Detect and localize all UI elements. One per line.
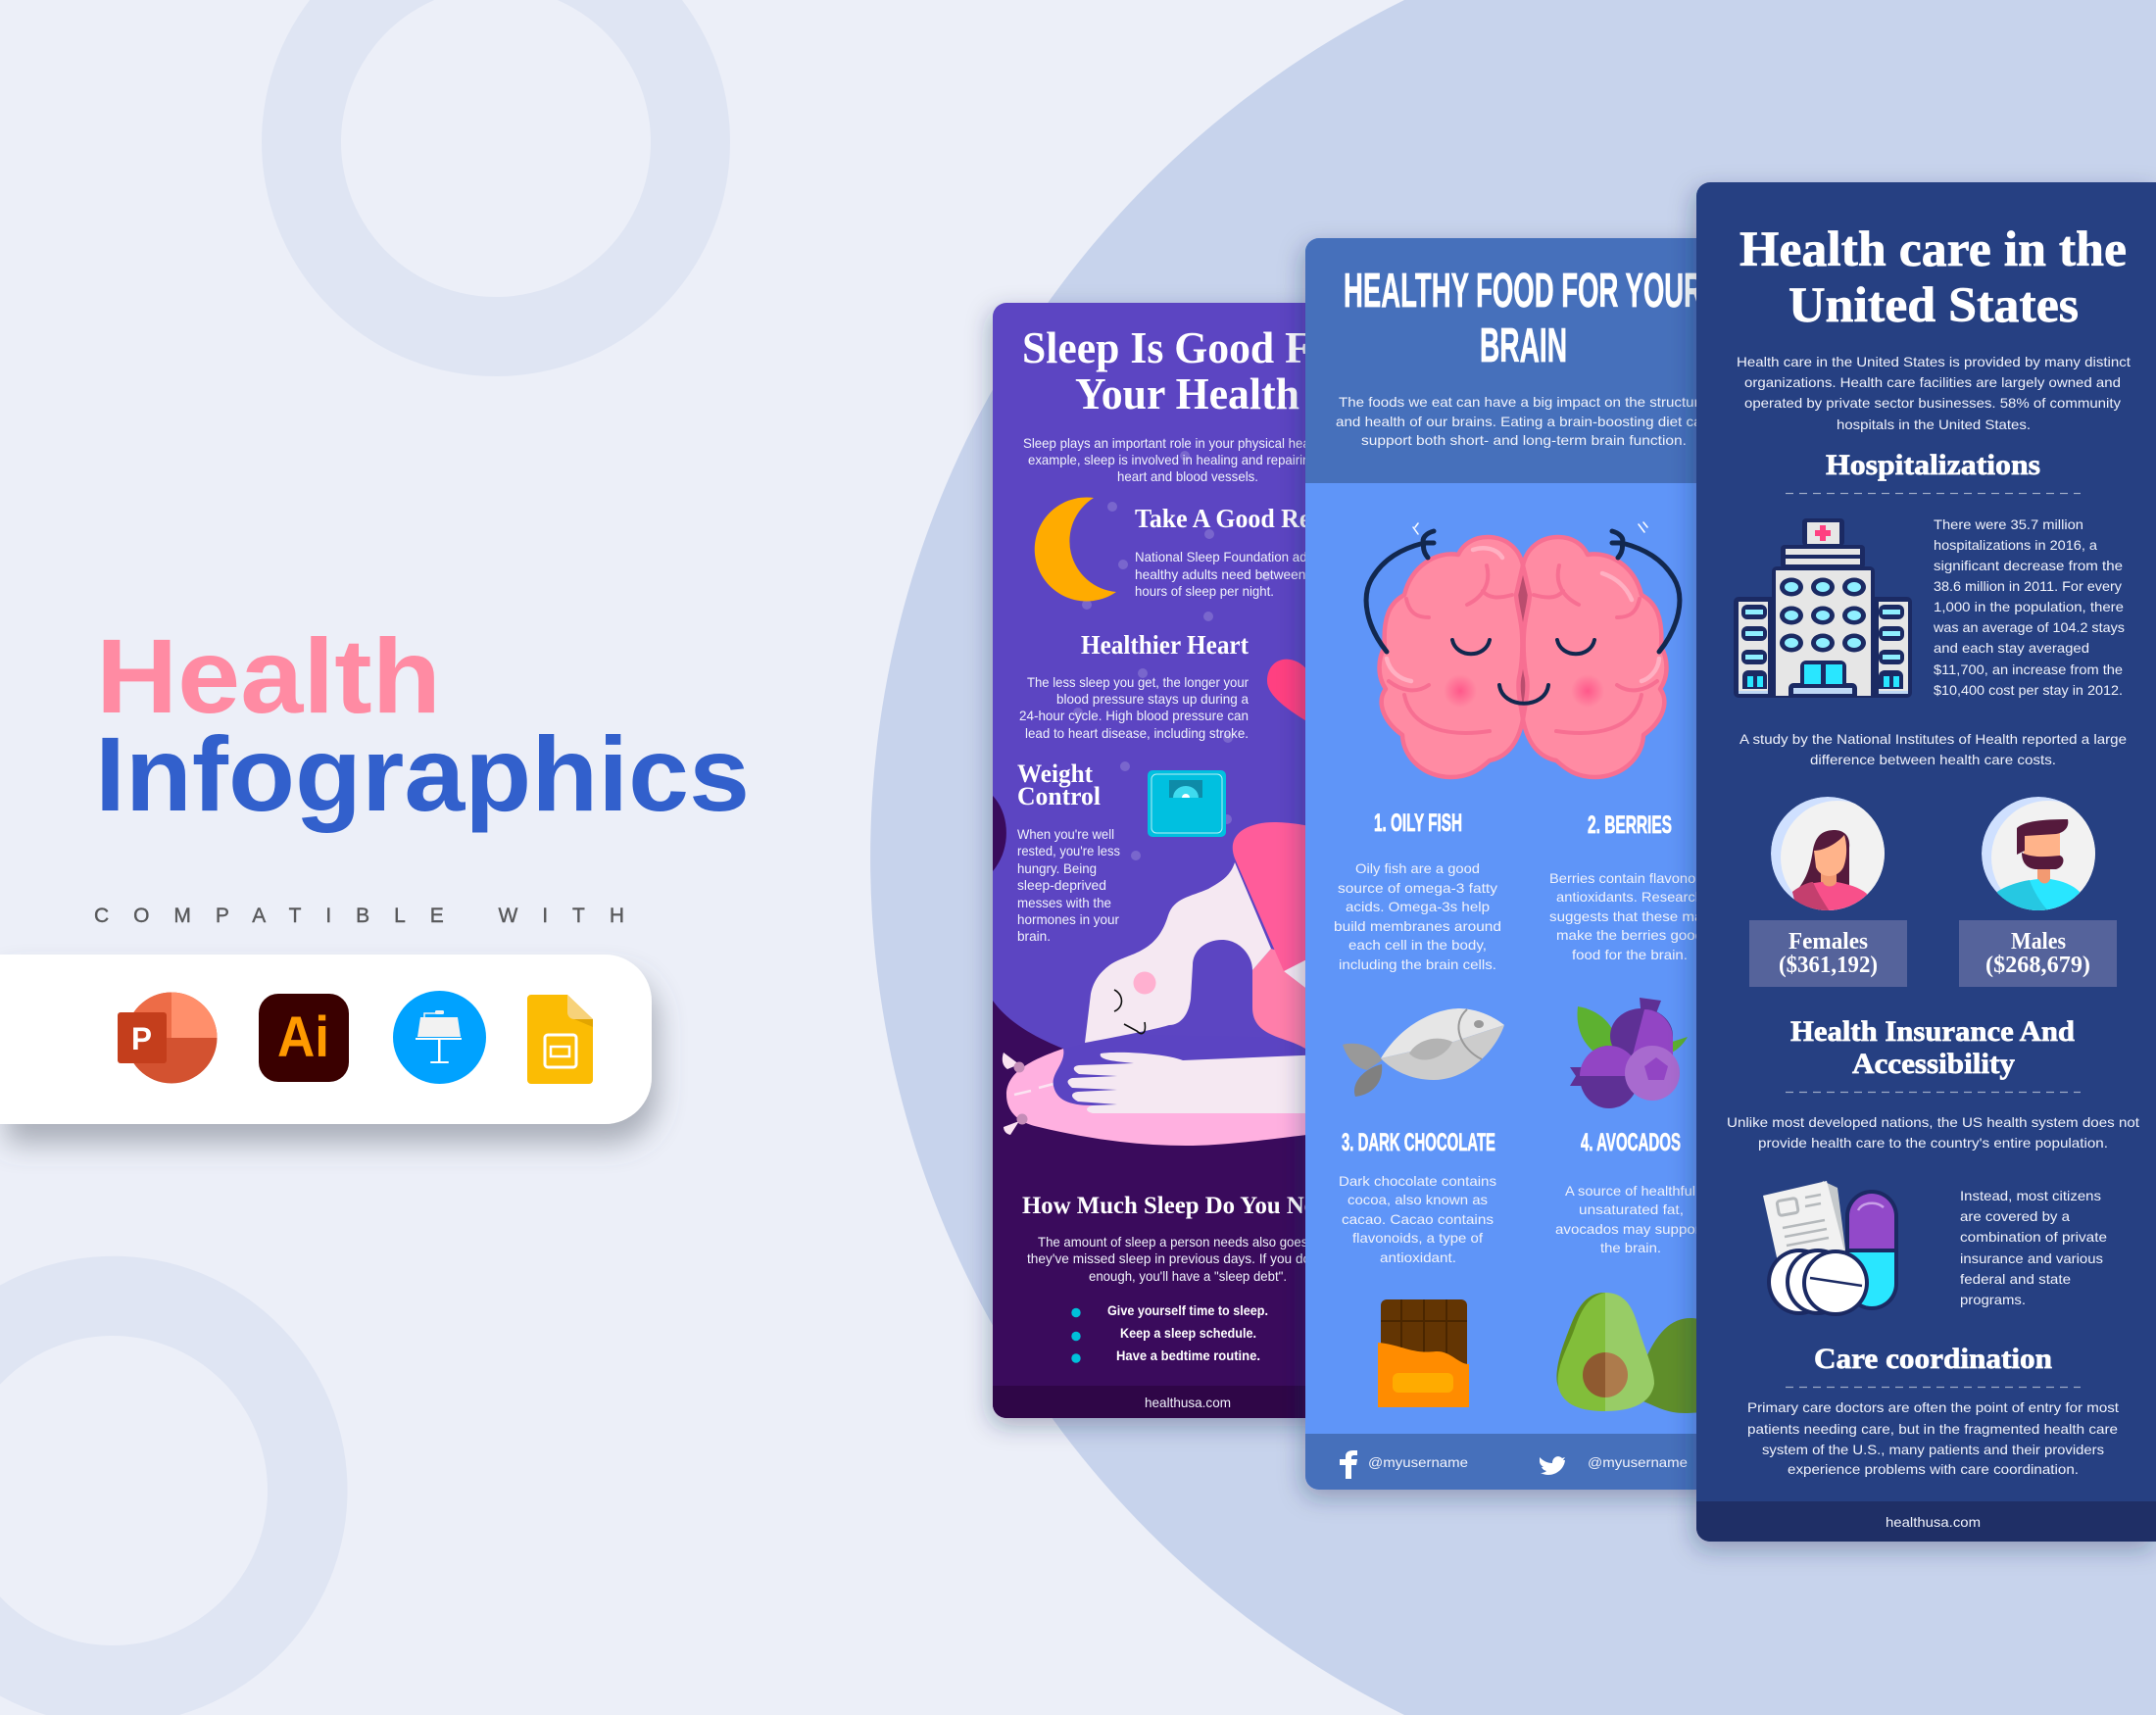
text: weight: [1017, 826, 1120, 944]
title: [95, 616, 750, 833]
item 4: avocados: the brain.: [1600, 1240, 1661, 1255]
text: weight: hormones in your: [1017, 911, 1119, 927]
text: NIH study: [1740, 731, 2127, 767]
text: sleep debt: [1027, 1234, 1347, 1284]
icon: Keynote: [393, 991, 486, 1084]
text: health intro: organizations. Health care facilities are largely owned and: [1744, 374, 2121, 390]
icon: Google Slides: [527, 995, 593, 1084]
item 3: dark chocolate: 3. DARK CHOCOLATE: [1342, 1129, 1495, 1156]
text: brain intro: The foods we eat can have a big impact on the structure: [1339, 394, 1707, 410]
item 2: berries: food for the brain.: [1572, 947, 1688, 962]
illustration: smiling brain: [1366, 522, 1680, 777]
heading: insurance: Health Insurance And: [1790, 1015, 2075, 1048]
sleeping figure illustration: [993, 796, 1372, 1418]
text: hospitalization stats: There were 35.7 million: [1934, 516, 2083, 532]
social handle: twitter: @myusername: [1588, 1454, 1688, 1470]
text: insurance detail: programs.: [1960, 1292, 2026, 1307]
icon: pills and report: [1763, 1181, 1898, 1316]
text: care coordination: experience problems with care coordination.: [1788, 1461, 2079, 1477]
text: brain intro: [1336, 394, 1710, 448]
heading: weight control: [1017, 760, 1101, 810]
icon: blueberries: [1570, 998, 1688, 1108]
item 2: berries: 2. BERRIES: [1588, 811, 1672, 839]
panel: sleep infographic: [993, 303, 1385, 1418]
heading: hospitalizations: Hospitalizations: [1826, 449, 2040, 481]
heading: sleep title: [1022, 322, 1351, 418]
text: weight: messes with the: [1017, 895, 1111, 910]
icon: heart: [1267, 660, 1372, 725]
icon: avocado: [1556, 1293, 1744, 1413]
label: females: [1749, 920, 1907, 987]
text: hospitalization stats: hospitalizations in 2016, a: [1934, 537, 2097, 553]
text: NIH study: A study by the National Institutes of Health reported a large: [1740, 731, 2127, 747]
text: hospitalization stats: and each stay averaged: [1934, 640, 2089, 656]
label: males: [1959, 920, 2117, 987]
text: weight: hungry. Being: [1017, 860, 1097, 876]
item 1: oily fish: acids. Omega-3s help: [1346, 899, 1490, 914]
text: heart: [1019, 674, 1249, 741]
text: insurance detail: combination of private: [1960, 1229, 2107, 1245]
item 1: oily fish: [1334, 809, 1501, 972]
subtitle: compatible with: COMPATIBLE WITH: [94, 905, 624, 927]
heading: sleep title: Sleep Is Good For: [1022, 322, 1351, 372]
icon: chocolate bar: [1378, 1299, 1469, 1407]
text: care coordination: patients needing care, but in the fragmented health care: [1747, 1421, 2118, 1437]
text: weight: sleep-deprived: [1017, 877, 1106, 893]
text: hospitalization stats: significant decrease from the: [1934, 558, 2123, 573]
item 2: berries: [1549, 811, 1714, 962]
text: insurance intro: Unlike most developed nations, the US health system does not: [1727, 1114, 2139, 1130]
item 3: dark chocolate: cocoa, also known as: [1348, 1192, 1488, 1207]
text: weight: rested, you're less: [1017, 843, 1120, 858]
icon: hospital: [1734, 518, 1912, 698]
footer url: healthusa.com: [1886, 1514, 1981, 1530]
text: hospitalization stats: 1,000 in the population, there: [1934, 599, 2124, 614]
avatar: male: [1982, 797, 2095, 910]
text: care coordination: system of the U.S., many patients and their providers: [1762, 1442, 2104, 1457]
text: hospitalization stats: 38.6 million in 2011. For every: [1934, 578, 2122, 594]
text: insurance detail: insurance and various: [1960, 1250, 2103, 1266]
item 1: oily fish: including the brain cells.: [1339, 956, 1496, 972]
label: males: Males: [2011, 929, 2066, 955]
item 3: dark chocolate: cacao. Cacao contains: [1342, 1211, 1494, 1227]
heading: brain food title: BRAIN: [1480, 319, 1567, 372]
text: care coordination: [1747, 1399, 2119, 1477]
item 3: dark chocolate: flavonoids, a type of: [1352, 1230, 1483, 1246]
panel: brain food infographic: [1305, 238, 1746, 1490]
text: hospitalization stats: $11,700, an increase from the: [1934, 662, 2123, 677]
heading: brain food title: [1344, 265, 1703, 372]
item 2: berries: suggests that these may: [1549, 908, 1710, 924]
heading: sleep title: Your Health: [1075, 368, 1299, 418]
item 4: avocados: 4. AVOCADOS: [1581, 1129, 1681, 1156]
text: health intro: operated by private sector businesses. 58% of community: [1744, 395, 2121, 411]
item 4: avocados: A source of healthful: [1565, 1183, 1695, 1199]
footer bar: [993, 1386, 1385, 1418]
text: insurance intro: provide health care to the country's entire population.: [1758, 1135, 2108, 1151]
item 3: dark chocolate: antioxidant.: [1380, 1250, 1456, 1265]
background large circle: [870, 0, 2156, 1715]
list: sleep tips: Give yourself time to sleep.: [1107, 1303, 1268, 1318]
heading: health care title: Health care in the: [1740, 222, 2127, 277]
text: rest: [1135, 549, 1337, 599]
icon: fish: [1343, 1008, 1504, 1097]
title: Health: [96, 616, 441, 735]
heading: take a good rest: Take A Good Rest: [1135, 504, 1329, 533]
heading: care coordination: Care coordination: [1814, 1343, 2052, 1375]
item 1: oily fish: Oily fish are a good: [1355, 860, 1480, 876]
item 4: avocados: unsaturated fat,: [1579, 1201, 1684, 1217]
item 2: berries: make the berries good: [1556, 927, 1703, 943]
text: hospitalization stats: $10,400 cost per stay in 2012.: [1934, 682, 2123, 698]
text: hospitalization stats: [1933, 516, 2125, 698]
heading: insurance: [1790, 1015, 2075, 1080]
text: intro: [1023, 435, 1350, 484]
avatar: female: [1771, 797, 1885, 910]
icon: twitter: [1540, 1456, 1565, 1475]
heading: brain food title: HEALTHY FOOD FOR YOUR: [1344, 265, 1703, 318]
heading: healthier heart: Healthier Heart: [1081, 630, 1249, 660]
icon: Illustrator: Ai: [277, 1005, 329, 1069]
text: intro: heart and blood vessels.: [1117, 468, 1258, 484]
icon: facebook: [1340, 1450, 1357, 1479]
text: rest: healthy adults need between 7-9: [1135, 566, 1329, 582]
text: weight: brain.: [1017, 928, 1051, 944]
heading: health care title: [1740, 222, 2127, 333]
text: health intro: Health care in the United States is provided by many distinct: [1737, 354, 2131, 369]
text: brain intro: and health of our brains. Eating a brain-boosting diet can: [1336, 414, 1710, 429]
item 3: dark chocolate: [1339, 1129, 1496, 1265]
heading: weight control: Control: [1017, 782, 1101, 810]
icon: scale: [1148, 770, 1226, 837]
text: heart: The less sleep you get, the longer your: [1027, 674, 1249, 690]
text: sleep debt: The amount of sleep a person needs also goes up if: [1038, 1234, 1336, 1250]
item 1: oily fish: 1. OILY FISH: [1374, 809, 1462, 837]
item 2: berries: Berries contain flavonoids: [1549, 870, 1714, 886]
item 3: dark chocolate: Dark chocolate contains: [1339, 1173, 1496, 1189]
text: insurance detail: are covered by a: [1960, 1208, 2070, 1224]
social handle: facebook: @myusername: [1368, 1454, 1468, 1470]
text: health intro: [1737, 354, 2131, 432]
heading: health care title: United States: [1788, 278, 2079, 333]
text: intro: Sleep plays an important role in your physical health. For: [1023, 435, 1350, 451]
list: sleep tips: [1071, 1303, 1268, 1363]
text: insurance detail: Instead, most citizens: [1960, 1188, 2101, 1203]
text: sleep debt: they've missed sleep in previous days. If you don't get: [1027, 1250, 1347, 1266]
text: NIH study: difference between health care costs.: [1810, 752, 2056, 767]
footer band: [1696, 1501, 2156, 1542]
icon: PowerPoint: [118, 992, 218, 1084]
text: care coordination: Primary care doctors are often the point of entry for most: [1747, 1399, 2119, 1415]
text: rest: hours of sleep per night.: [1135, 583, 1274, 599]
heading: how much sleep: How Much Sleep Do You Need?: [1022, 1193, 1351, 1219]
text: intro: example, sleep is involved in healing and repairing your: [1028, 452, 1346, 467]
text: brain intro: support both short- and long-term brain function.: [1361, 432, 1687, 448]
item 1: oily fish: build membranes around: [1334, 918, 1501, 934]
background bottom ring: [0, 1256, 348, 1715]
background dots: [1073, 451, 1271, 860]
text: rest: National Sleep Foundation advises: [1135, 549, 1337, 564]
text: sleep debt: enough, you'll have a "sleep debt".: [1089, 1268, 1287, 1284]
text: heart: 24-hour cycle. High blood pressure can: [1019, 708, 1249, 723]
label: females: Females: [1788, 929, 1868, 955]
header band: [1305, 238, 1746, 483]
heading: weight control: Weight: [1017, 760, 1093, 788]
text: heart: blood pressure stays up during a: [1056, 691, 1249, 707]
text: health intro: hospitals in the United States.: [1837, 416, 2031, 432]
text: weight: When you're well: [1017, 826, 1114, 842]
list: sleep tips: Keep a sleep schedule.: [1120, 1326, 1256, 1341]
label: males: ($268,679): [1985, 953, 2090, 978]
item 2: berries: antioxidants. Research: [1556, 889, 1703, 905]
panel: compatibility pill: [0, 955, 652, 1124]
item 1: oily fish: source of omega-3 fatty: [1338, 880, 1497, 896]
label: females: ($361,192): [1779, 953, 1878, 978]
heading: insurance: Accessibility: [1852, 1048, 2015, 1080]
list: sleep tips: Have a bedtime routine.: [1116, 1348, 1260, 1363]
icon: moon: [1035, 497, 1116, 601]
panel: US health care infographic: [1696, 182, 2156, 1542]
text: heart: lead to heart disease, including stroke.: [1025, 725, 1249, 741]
background top ring: [262, 0, 730, 376]
item 4: avocados: [1555, 1129, 1704, 1255]
icon: PowerPoint: P: [131, 1021, 152, 1056]
title: Infographics: [95, 714, 750, 833]
footer url: healthusa.com: [1145, 1395, 1231, 1410]
item 4: avocados: avocados may support: [1555, 1221, 1704, 1237]
item 1: oily fish: each cell in the body,: [1348, 937, 1487, 953]
text: insurance detail: [1960, 1188, 2107, 1307]
text: insurance intro: [1727, 1114, 2139, 1151]
icon: Illustrator: [259, 994, 349, 1082]
text: hospitalization stats: was an average of 104.2 stays: [1933, 619, 2125, 635]
footer band: [1305, 1434, 1746, 1490]
text: insurance detail: federal and state: [1960, 1271, 2071, 1287]
